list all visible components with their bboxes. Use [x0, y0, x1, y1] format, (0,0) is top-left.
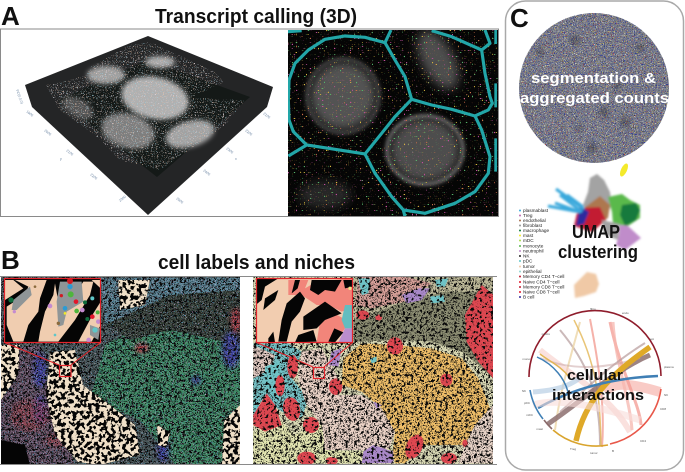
legend: epithelial: [523, 269, 542, 274]
panel C frame: [506, 1, 684, 470]
heading: segmentation: aggregated counts: [520, 90, 669, 107]
map: cell labels: [1, 277, 241, 465]
sector labels: Treg: [570, 447, 576, 451]
axis tick labels: y: [60, 157, 62, 161]
tumor epithelium: [1, 277, 240, 465]
chords: [533, 319, 660, 447]
chart: chord diagram: [522, 307, 674, 455]
axis tick labels: 2500: [175, 197, 184, 205]
sector labels: CD4: [640, 439, 646, 443]
axis tick labels: 2300: [118, 195, 127, 203]
axis tick labels: 2100: [65, 149, 74, 157]
image: segmented cells with transcripts: [288, 24, 498, 217]
stroma band: [353, 292, 493, 378]
legend: macrophage: [523, 228, 549, 233]
chart: UMAP: [548, 174, 641, 298]
axis tick labels: 2300: [225, 147, 234, 155]
heading: cellular interactions: cellular: [567, 368, 623, 384]
sector labels: NK: [522, 389, 526, 393]
legend: endothelial: [523, 218, 546, 223]
sector labels: macro: [542, 332, 550, 336]
heading: segmentation: [520, 70, 669, 107]
legend: pDC: [523, 258, 533, 264]
sector labels: B: [612, 449, 614, 453]
panel label B: B: [1, 245, 20, 275]
sector labels: mDC: [526, 413, 534, 417]
legend: B cell: [523, 294, 534, 300]
axis tick labels: 2200: [244, 129, 253, 137]
axis tick labels: 2200: [89, 173, 98, 181]
outer arcs: [529, 311, 661, 446]
legend: plasmablast: [523, 208, 549, 213]
nuclei: [299, 24, 467, 209]
tissue holes: [253, 277, 493, 464]
legend: NK: [523, 254, 530, 258]
cell boundaries: [288, 30, 496, 217]
sector labels: tumor: [590, 451, 598, 455]
axis tick labels: [15, 89, 271, 205]
legend: Treg: [523, 213, 533, 218]
transcript dots: [288, 30, 498, 216]
image: aggregated counts disc: [519, 13, 669, 163]
heading: cellular interactions: interactions: [552, 388, 644, 404]
legend: mDC: [523, 238, 534, 243]
title: transcript calling: Transcript calling (3D): [155, 6, 357, 28]
heading: UMAP clustering: UMAP: [572, 222, 620, 242]
panel A frame: [0, 29, 498, 216]
legend: tumor: [523, 264, 535, 269]
legend: [519, 208, 564, 300]
legend: Memory CD4 T−cell: [523, 274, 564, 279]
inset: [4, 278, 101, 376]
legend: fibroblast: [523, 223, 543, 228]
sector labels: NK: [664, 393, 668, 397]
sector labels: mast: [536, 427, 543, 431]
axis tick labels: 2100: [262, 112, 271, 120]
icon: yellow cluster: [618, 162, 630, 178]
panel B frame: [0, 276, 497, 464]
axis tick labels: x: [235, 157, 237, 161]
sector labels: endo: [622, 311, 629, 315]
sector labels: [522, 307, 674, 455]
panel label A: A: [1, 1, 20, 31]
legend: Naive CD8 T−cell: [523, 290, 560, 294]
sector labels: pDC: [524, 401, 531, 405]
legend: mast: [523, 233, 534, 238]
panel label C: C: [510, 3, 529, 33]
map: niches: [253, 277, 493, 465]
black speckle: [253, 277, 493, 464]
axis tick labels: 1900: [25, 110, 34, 118]
axis tick labels: PC(0,0,0): [15, 89, 24, 104]
inset: [256, 278, 352, 378]
label speckle: [1, 277, 240, 464]
sector labels: CD8: [660, 407, 666, 411]
chart: 3D transcript volume: [15, 36, 273, 215]
axis tick labels: 2000: [43, 129, 52, 137]
heading: cellular interactions: [552, 368, 644, 404]
axis tick labels: 2400: [202, 169, 211, 177]
sector labels: mono: [522, 357, 530, 361]
sector labels: epi: [650, 337, 654, 341]
legend: Naive CD4 T−cell: [523, 280, 560, 284]
heading: UMAP clustering: clustering: [558, 242, 638, 262]
solid niches: [253, 278, 493, 465]
title: cell labels and niches: cell labels and niches: [158, 252, 355, 274]
legend: Memory CD8 T−cell: [523, 284, 564, 290]
sector labels: fibro: [590, 307, 596, 311]
legend: neutrophil: [523, 248, 544, 254]
niche regions: [253, 343, 308, 418]
heading: UMAP clustering: [558, 222, 638, 262]
heading: segmentation: segmentation &: [531, 70, 656, 87]
sector labels: plasma: [664, 365, 674, 369]
legend: monocyte: [523, 244, 544, 248]
